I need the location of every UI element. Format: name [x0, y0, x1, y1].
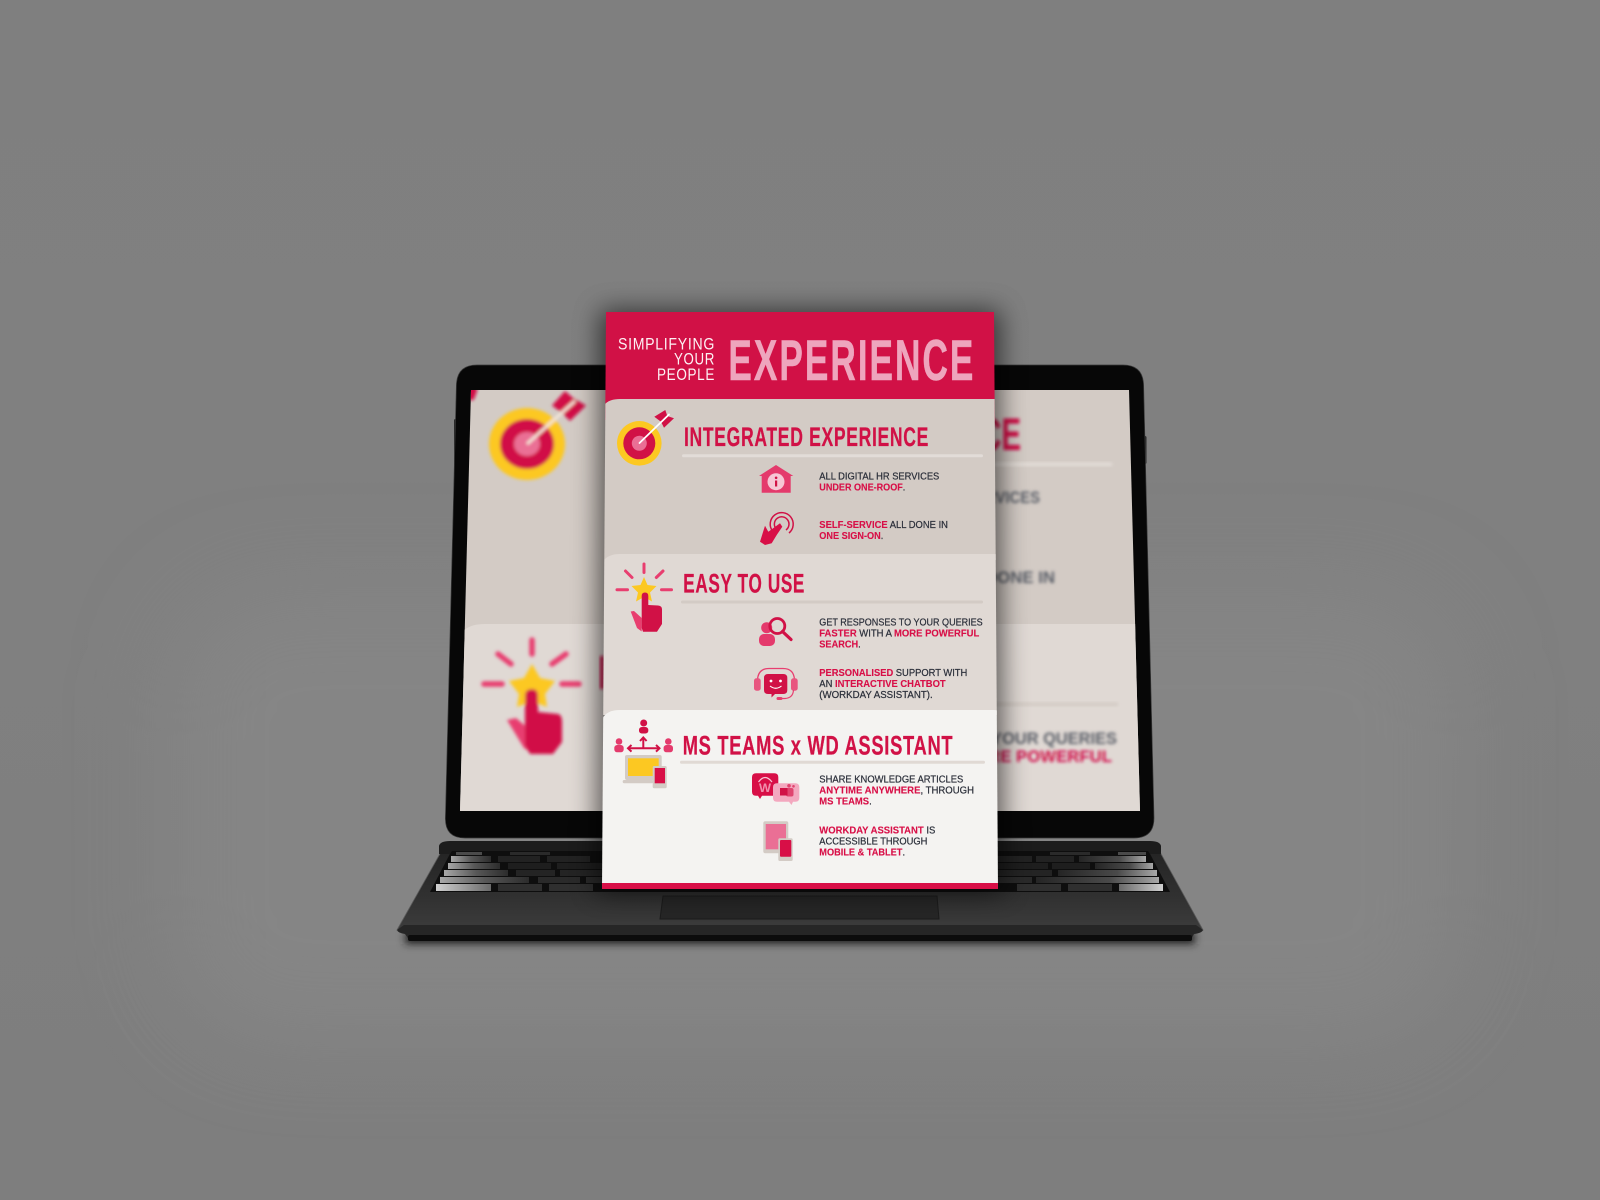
card shadow	[596, 310, 1004, 892]
blurred star hand icon	[484, 640, 579, 754]
text block: chatbot: AN INTERACTIVE CHATBOT	[819, 679, 946, 690]
panel: integrated experience	[600, 399, 1000, 560]
blurred screen section	[455, 624, 1145, 815]
panel: easy to use	[600, 554, 1000, 715]
icon: people and devices	[614, 720, 673, 788]
text block: ms teams	[819, 775, 974, 805]
blurred text lines: ORE POWERFUL	[975, 747, 1112, 766]
blurred text lines: DONE IN	[985, 568, 1055, 587]
text block: ms teams: SHARE KNOWLEDGE ARTICLES	[819, 774, 964, 785]
header small title: YOUR	[674, 351, 715, 369]
text block: search	[819, 618, 983, 651]
laptop screen with blurred infographic	[455, 385, 1145, 815]
laptop lid bezel	[445, 365, 1154, 838]
heading: MS TEAMS x WD ASSISTANT	[683, 730, 953, 760]
text block: ms teams: MS TEAMS.	[819, 797, 872, 808]
laptop mockup	[397, 365, 1203, 944]
text block: mobile and tablet: WORKDAY ASSISTANT IS	[819, 825, 936, 836]
icon: tap hand	[760, 513, 793, 545]
text block: mobile and tablet: MOBILE & TABLET.	[819, 847, 905, 858]
blurred text lines	[995, 489, 1118, 765]
text block: one roof: ALL DIGITAL HR SERVICES	[819, 471, 940, 482]
footer band	[602, 883, 998, 889]
blurred target icon	[489, 391, 586, 480]
trackpad	[660, 896, 939, 919]
icon: workday and teams chat bubbles	[752, 773, 799, 805]
blurred text lines: R YOUR QUERIES	[975, 729, 1117, 748]
text block: one roof: UNDER ONE-ROOF.	[819, 482, 905, 493]
lip	[397, 925, 1203, 941]
heading: EASY TO USE	[683, 568, 805, 598]
blurred text lines: RVICES	[985, 488, 1040, 507]
header small title	[618, 338, 714, 380]
text block: chatbot: PERSONALISED SUPPORT WITH	[819, 668, 967, 679]
text block: search: SEARCH.	[819, 640, 861, 651]
icon: star and pointing hand	[617, 564, 672, 632]
laptop side buttons	[454, 419, 1146, 467]
blurred heading fragment left	[600, 656, 604, 689]
text block: self service	[820, 520, 948, 540]
text block: chatbot: (WORKDAY ASSISTANT).	[819, 690, 933, 701]
text block: ms teams: ANYTIME ANYWHERE, THROUGH	[819, 786, 974, 797]
text block: search: GET RESPONSES TO YOUR QUERIES	[819, 618, 983, 629]
keys well	[430, 850, 1170, 892]
text block: mobile and tablet: ACCESSIBLE THROUGH	[819, 836, 927, 847]
keyboard deck	[397, 841, 1203, 941]
text block: one roof	[819, 472, 939, 491]
laptop ground shadow	[405, 932, 1195, 944]
blurred heading letters: CE	[980, 409, 1021, 460]
header small title: SIMPLIFYING	[618, 335, 715, 353]
icon: workday and teams chat bubbles: W	[759, 783, 771, 795]
infographic card	[595, 310, 1005, 890]
text block: mobile and tablet	[819, 825, 936, 858]
text block: self service: ONE SIGN-ON.	[819, 531, 883, 542]
icon: tablet and phone	[763, 821, 793, 861]
text block: self service: SELF-SERVICE ALL DONE IN	[819, 520, 948, 531]
header band	[595, 310, 1005, 420]
infographic scene	[396, 294, 1204, 949]
header small title: PEOPLE	[657, 366, 715, 384]
heading: INTEGRATED EXPERIENCE	[684, 422, 929, 452]
text block: chatbot	[819, 668, 967, 701]
keys	[436, 852, 1163, 891]
hinge	[439, 841, 1161, 854]
icon: chatbot	[754, 668, 798, 700]
header big title: EXPERIENCE	[728, 329, 975, 393]
icon: target	[617, 410, 674, 466]
text block: search: FASTER WITH A MORE POWERFUL	[819, 629, 979, 640]
icon: info house	[759, 465, 793, 493]
panel: ms teams x wd assistant	[600, 710, 1000, 890]
icon: person search	[759, 618, 791, 646]
